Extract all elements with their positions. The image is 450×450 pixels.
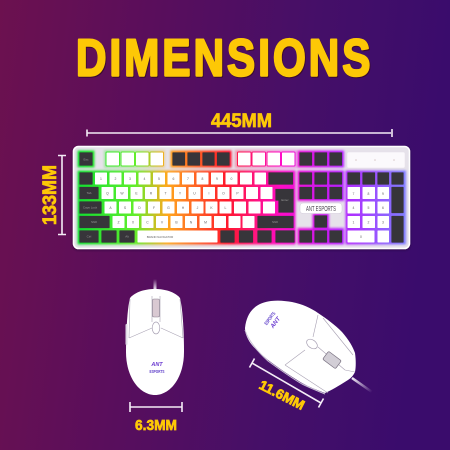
key labels: 0 [231, 177, 233, 181]
white keys [94, 152, 390, 243]
scroll wheel [152, 299, 160, 317]
keyboard body [74, 146, 410, 248]
key labels: Z [117, 220, 120, 224]
dark keys [79, 152, 404, 243]
key labels: 2 [368, 220, 370, 224]
mouse logo: ANT [269, 315, 283, 331]
dimension: mouse length [250, 358, 324, 413]
mouse cable [352, 378, 372, 392]
dark key labels: Ctrl [87, 234, 92, 238]
key labels: Y [179, 192, 182, 196]
key labels [100, 177, 384, 239]
mouse logo [150, 362, 165, 375]
dark key labels: Esc [83, 158, 89, 162]
dark key labels: Alt [125, 234, 129, 238]
mouse logo [263, 311, 283, 331]
key labels: 7 [353, 192, 355, 196]
dimension: keyboard height [40, 156, 66, 234]
key labels: 3 [382, 220, 384, 224]
key glow [78, 150, 406, 244]
key labels: G [167, 206, 170, 210]
key labels: B [175, 220, 178, 224]
key labels: 3 [129, 177, 131, 181]
side buttons [126, 324, 128, 345]
scroll wheel [323, 351, 341, 369]
key labels: V [161, 220, 164, 224]
dark key labels: Shift [272, 220, 278, 224]
key labels: M [204, 220, 207, 224]
dark key labels: Enter [281, 198, 289, 202]
brand logo plate: ANT ESPORTS [306, 204, 336, 213]
key labels: T [164, 192, 167, 196]
key labels: C [146, 220, 149, 224]
key labels: 1 [100, 177, 102, 181]
mouse body [126, 289, 184, 395]
key labels: 9 [382, 192, 384, 196]
mouse top view [126, 279, 184, 395]
key labels: 6 [382, 206, 384, 210]
LED indicator panel [347, 152, 405, 168]
panel seams [129, 296, 183, 338]
key labels: N [190, 220, 193, 224]
dark key labels: Shift [91, 220, 97, 224]
key labels: H [182, 206, 185, 210]
key labels: 5 [368, 206, 370, 210]
key labels: U [193, 192, 196, 196]
key labels: X [132, 220, 135, 224]
key labels: D [138, 206, 141, 210]
panel seams [285, 315, 355, 393]
keyboard [74, 146, 410, 248]
key labels: 6 [173, 177, 175, 181]
key labels: S [124, 206, 127, 210]
key labels: E [135, 192, 138, 196]
key labels: 7 [187, 177, 189, 181]
mouse logo: ESPORTS [263, 311, 278, 327]
mouse logo: ANT [150, 362, 163, 368]
key labels: 8 [368, 192, 370, 196]
key labels: 5 [158, 177, 160, 181]
key labels: K [210, 206, 213, 210]
key labels: 2 [115, 177, 117, 181]
key labels: 0 [360, 235, 362, 239]
key labels: 8 [202, 177, 204, 181]
dark key labels: Caps Lock [83, 206, 98, 210]
dimension: keyboard width [87, 111, 392, 137]
dimension: keyboard width: 445MM [211, 111, 272, 132]
key labels: P [236, 192, 239, 196]
key labels: A [109, 206, 112, 210]
mouse logo: ESPORTS [150, 369, 165, 375]
key labels: R [150, 192, 153, 196]
function row light glow [104, 150, 297, 168]
key labels: W [120, 192, 124, 196]
dark key labels [83, 158, 289, 238]
key labels: 9 [216, 177, 218, 181]
key labels: L [225, 206, 227, 210]
key labels: 4 [144, 177, 146, 181]
key labels: 1 [353, 220, 355, 224]
brand logo plate [300, 203, 342, 214]
key labels: Q [106, 192, 109, 196]
mouse body [245, 301, 356, 393]
key labels: F [153, 206, 155, 210]
mouse angled view [245, 301, 372, 394]
key labels: J [197, 206, 199, 210]
dimension: mouse length: 11.6MM [257, 377, 307, 413]
dpi button [305, 337, 319, 351]
dimension: keyboard height: 133MM [40, 165, 61, 225]
mouse cable [154, 279, 156, 290]
key labels: O [222, 192, 225, 196]
dimension: mouse width [130, 402, 182, 434]
key labels: BRAND NAVIGATOR [147, 235, 173, 239]
dpi button [152, 322, 160, 334]
key labels: 4 [353, 206, 355, 210]
dark key labels: Tab [87, 191, 92, 195]
dimension: mouse width: 6.3MM [135, 417, 177, 434]
title: DIMENSIONS [76, 29, 373, 88]
underside edge [245, 330, 325, 394]
key labels: I [209, 192, 210, 196]
